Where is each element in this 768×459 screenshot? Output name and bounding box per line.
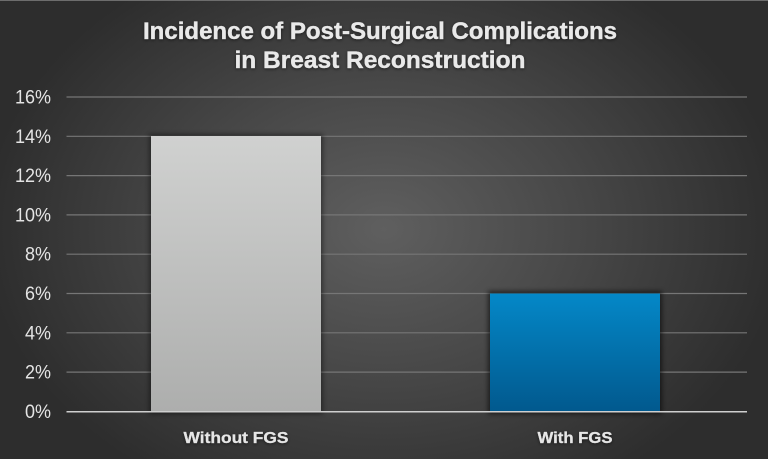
y-axis labels: 6% xyxy=(25,284,51,305)
bar: Without FGS 14% xyxy=(149,134,323,414)
title: in Breast Reconstruction xyxy=(234,47,526,74)
y-axis labels: 12% xyxy=(15,166,51,187)
x-axis labels: Without FGS xyxy=(184,430,289,447)
x-axis baseline xyxy=(66,411,747,413)
title xyxy=(143,18,617,74)
y-axis labels: 4% xyxy=(25,323,51,344)
y-axis labels: 16% xyxy=(15,88,51,108)
y-axis labels: 8% xyxy=(25,245,51,266)
bar: With FGS 6% xyxy=(488,291,662,414)
title: Incidence of Post-Surgical Complications xyxy=(143,18,617,45)
x-axis labels xyxy=(184,430,613,447)
y-axis labels: 14% xyxy=(15,127,51,148)
gridlines xyxy=(66,97,747,372)
x-axis labels: With FGS xyxy=(538,430,613,447)
y-axis labels: 10% xyxy=(15,205,51,226)
y-axis labels: 2% xyxy=(25,363,51,384)
y-axis labels xyxy=(15,88,51,423)
y-axis labels: 0% xyxy=(25,402,51,423)
